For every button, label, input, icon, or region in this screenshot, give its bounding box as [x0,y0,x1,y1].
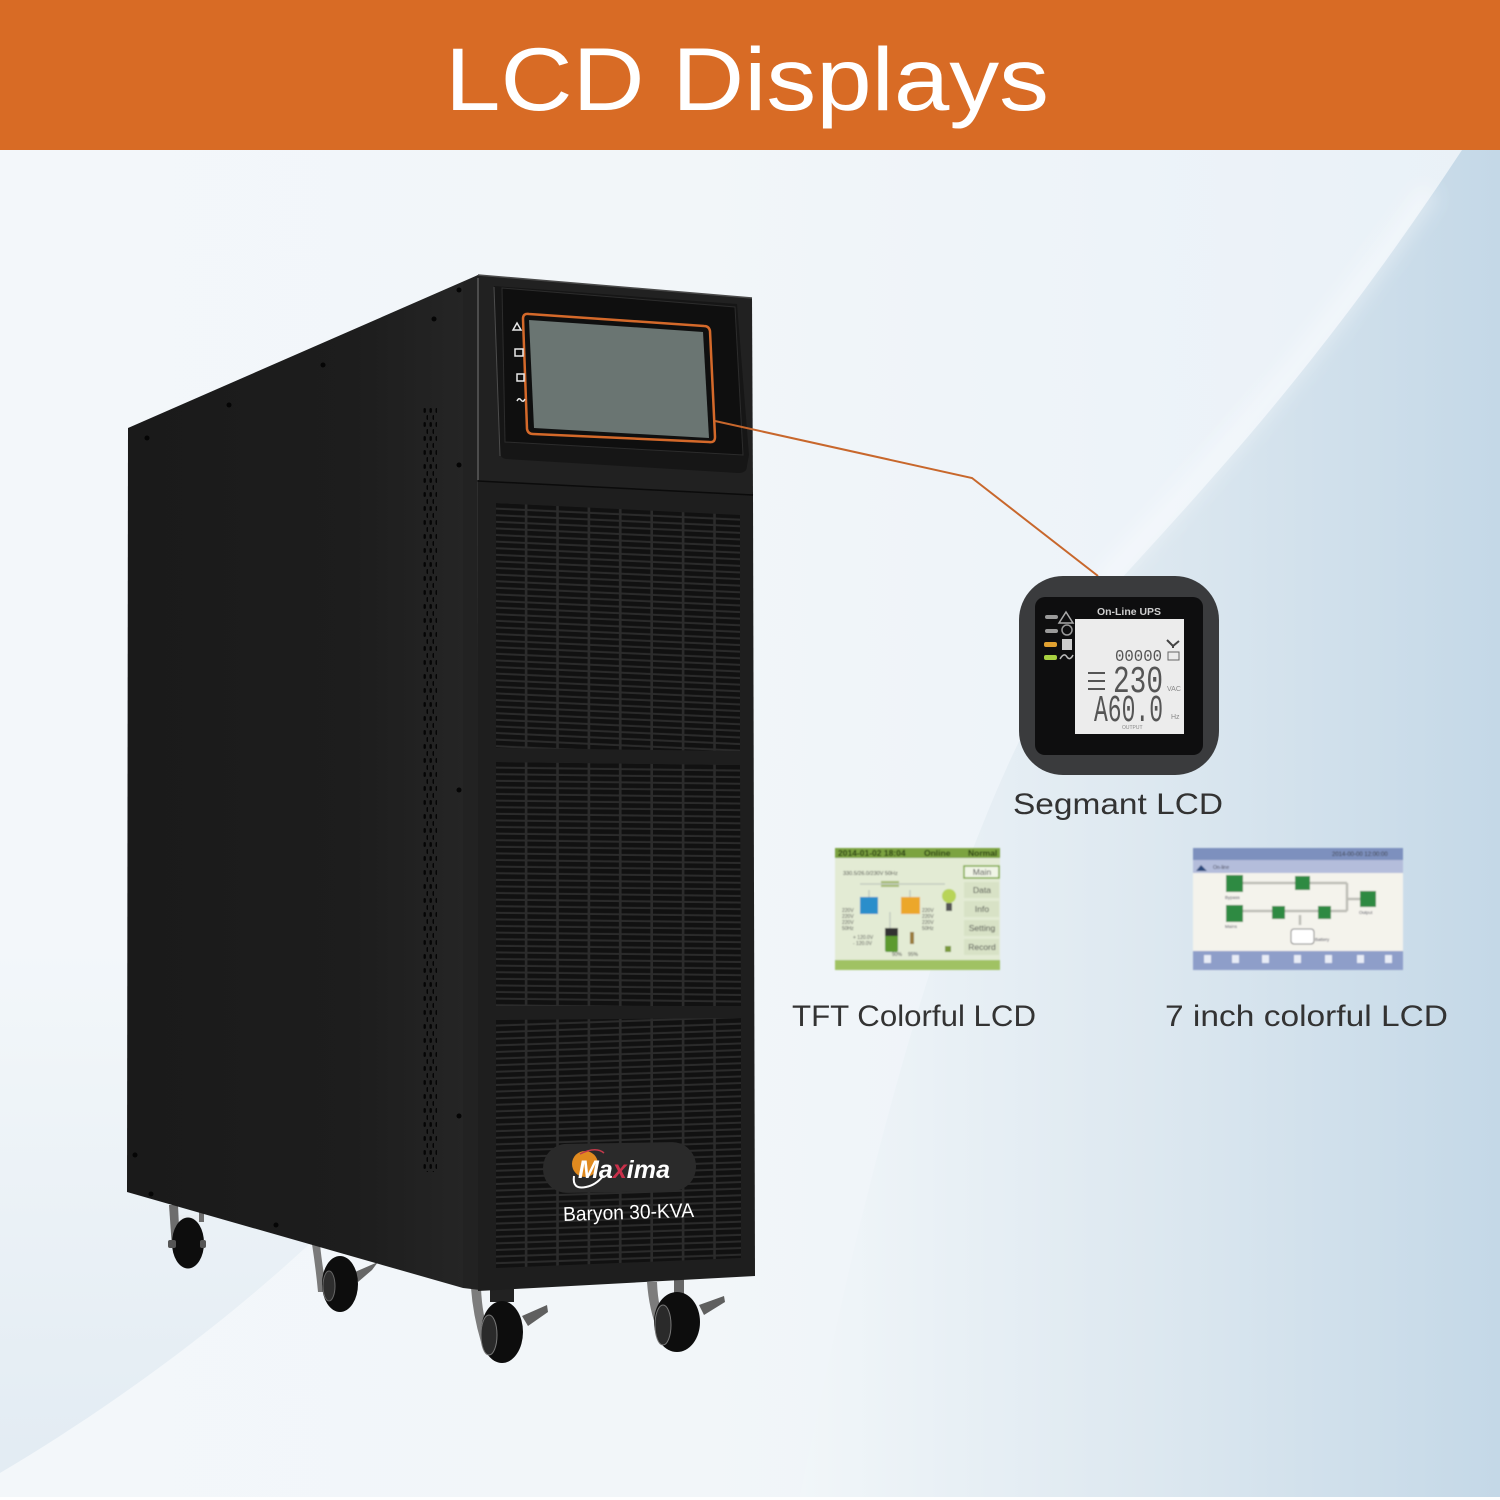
panel: TFT colorful LCD: 90% [892,952,903,958]
panel: TFT colorful LCD: Normal [968,848,997,858]
heading on bezel: On-Line UPS [1097,607,1161,618]
front top control panel [478,275,753,495]
UPS tower [127,275,755,1363]
bezel lip [494,286,749,473]
panel: segment LCD: Hz [1171,714,1180,721]
panel: TFT colorful LCD: 220V [922,914,934,920]
caster: rear left [168,1205,206,1268]
panel: TFT colorful LCD: 220V [842,920,854,926]
indicator lights [1044,612,1073,660]
segment readouts [1094,648,1163,733]
panel: TFT colorful LCD: Online [924,848,951,858]
panel: TFT colorful LCD: 50Hz [842,926,854,932]
panel: 7 inch colorful LCD: Mains [1225,924,1238,929]
panel: TFT colorful LCD [835,848,1000,970]
segment readouts: A60.0 [1094,690,1163,733]
caster: rear right [312,1244,378,1312]
segment readouts: 00000 [1115,648,1162,667]
panel: TFT colorful LCD: 220V [842,908,854,914]
caster: front right [647,1278,725,1352]
side screws [132,288,462,1228]
panel: TFT colorful LCD: - 120.0V [853,941,873,947]
screen [529,320,709,438]
title: LCD Displays [445,29,1049,129]
corner post [463,275,480,1290]
grille upper [496,503,740,751]
panel: segment LCD: VAC [1167,686,1181,693]
panel: TFT colorful LCD: 95% [908,952,919,958]
panel: 7 inch colorful LCD: Battery [1315,937,1330,942]
callout line from tower screen to segment LCD [715,421,1098,576]
caster: front left [471,1288,548,1363]
model label: Baryon 30-KVA [563,1200,695,1226]
title banner [0,0,1500,150]
status icons [513,323,525,401]
panel: 7 inch colorful LCD: 2014-00-00 12:00:00 [1332,852,1388,858]
bezel recess [502,288,743,455]
brand logo: Maxima [578,1156,670,1184]
panel: 7 inch colorful LCD [1193,848,1403,970]
panel: TFT colorful LCD: + 120.0V [853,935,874,941]
blue converter block [860,897,878,914]
panel: TFT colorful LCD: Record [968,942,996,952]
orange converter block [901,897,920,914]
panel: TFT colorful LCD: Setting [969,923,996,933]
grille middle [496,762,741,1006]
panel: 7 inch colorful LCD: Output [1359,910,1373,915]
panel: segment LCD [1019,576,1219,775]
panel: TFT colorful LCD: 330.5/26.0/230V 50Hz [843,871,898,877]
label: 7 inch colorful LCD: 7 inch colorful LCD [1165,1000,1448,1033]
segment readouts: 230 [1113,661,1163,704]
panel: TFT colorful LCD: Data [973,885,991,895]
brand logo [543,1142,696,1193]
panel: 7 inch colorful LCD: Bypass [1225,895,1241,900]
panel: segment LCD: OUTPUT [1122,725,1143,731]
panel: TFT colorful LCD: 2014-01-02 18:04 [838,848,906,858]
side vent strip [422,408,437,1172]
side panel [127,275,478,1288]
panel: TFT colorful LCD: 220V [922,908,934,914]
panel: TFT colorful LCD: 220V [842,914,854,920]
segment LCD screen [1075,619,1184,734]
label: segment LCD: Segmant LCD [1013,788,1223,821]
panel: 7 inch colorful LCD: On-line [1213,865,1229,871]
label: TFT colorful LCD: TFT Colorful LCD [792,1000,1036,1033]
orange screen highlight [523,314,715,442]
panel: TFT colorful LCD: 50Hz [922,926,934,932]
panel: TFT colorful LCD: 220V [922,920,934,926]
battery [885,928,898,952]
panel: TFT colorful LCD: Main [973,867,991,877]
grille lower [496,1018,741,1268]
bulb [942,889,956,903]
front lower panel [478,480,755,1291]
panel: TFT colorful LCD: Info [975,904,989,914]
